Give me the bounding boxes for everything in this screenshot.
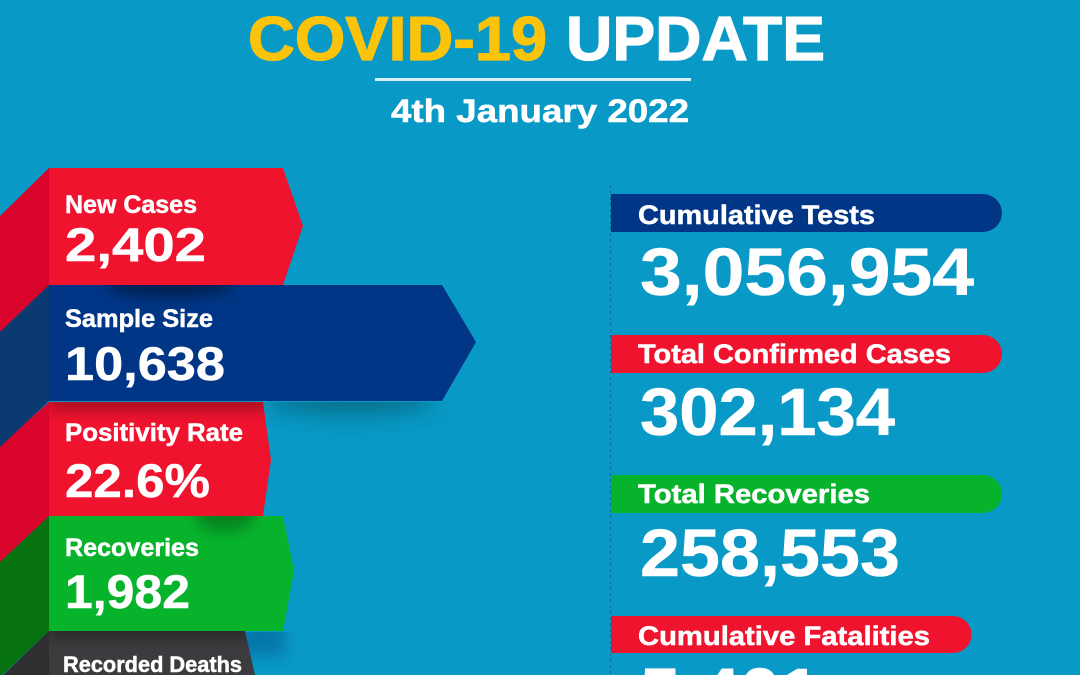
panel: positivity rate ribbon [0, 392, 271, 562]
panel: sample size ribbon: 10,638 [65, 337, 225, 390]
dotted vertical rule [610, 185, 612, 675]
title divider [375, 78, 691, 81]
panel: cumulative fatalities: Cumulative Fatalities [638, 621, 930, 651]
panel: recorded deaths ribbon [3, 631, 255, 675]
panel: recoveries ribbon [0, 500, 294, 675]
panel: sample size ribbon: Sample Size [65, 305, 213, 333]
panel: positivity rate ribbon: Positivity Rate [65, 419, 243, 447]
panel: new cases ribbon: New Cases [65, 191, 197, 219]
panel: total confirmed cases: 302,134 [640, 375, 895, 450]
panel: total confirmed cases: Total Confirmed Cases [638, 339, 951, 369]
panel: cumulative fatalities [611, 616, 972, 675]
date: 4th January 2022 [391, 93, 689, 129]
panel: recoveries ribbon: 1,982 [65, 565, 190, 618]
panel: cumulative tests: Cumulative Tests [638, 200, 875, 230]
panel: cumulative tests: 3,056,954 [640, 235, 974, 310]
title: UPDATE [566, 5, 825, 74]
shadow right of deaths ribbon [245, 632, 290, 662]
panel: total confirmed cases [611, 335, 1002, 450]
panel: total recoveries: Total Recoveries [638, 479, 870, 509]
panel: total recoveries: 258,553 [640, 516, 900, 591]
panel: sample size ribbon [0, 269, 476, 447]
panel: cumulative tests [611, 194, 1002, 310]
panel: new cases ribbon [0, 168, 303, 332]
title [248, 5, 825, 74]
panel: recoveries ribbon: Recoveries [65, 534, 199, 562]
panel: positivity rate ribbon: 22.6% [65, 454, 210, 507]
shadow under sample size ribbon [263, 402, 438, 426]
panel: new cases ribbon: 2,402 [65, 218, 206, 271]
title: COVID-19 [248, 5, 547, 74]
panel: total recoveries [611, 475, 1002, 591]
